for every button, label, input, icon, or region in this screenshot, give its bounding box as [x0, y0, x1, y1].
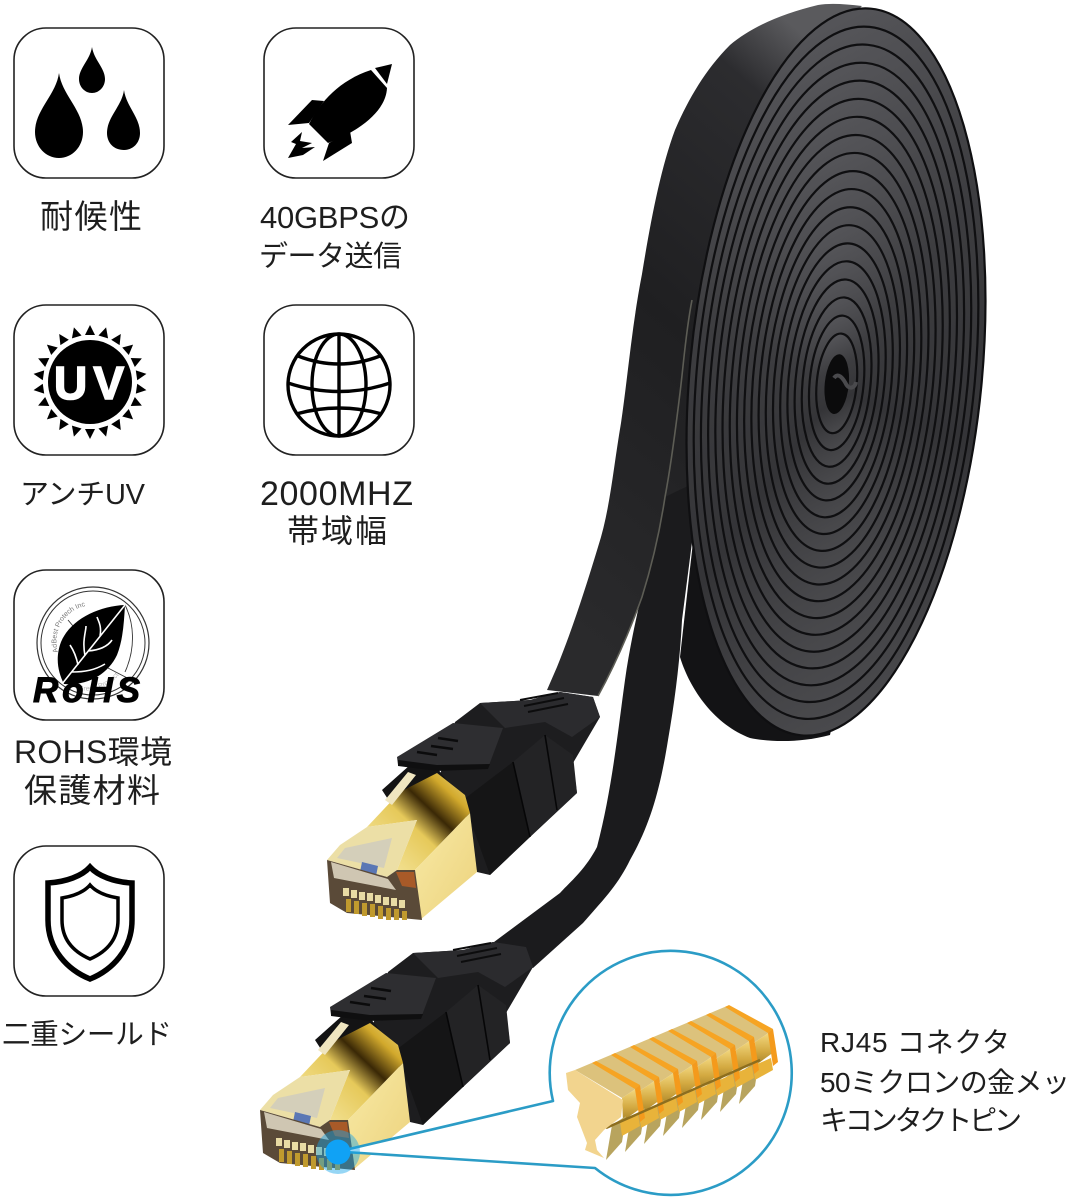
label: weather resistance: 耐候性 — [40, 198, 142, 235]
lower coil band — [680, 480, 860, 741]
icon: anti UV sun — [14, 305, 164, 455]
cable coil — [490, 0, 1016, 968]
callout: blue magnifier outline — [345, 951, 792, 1195]
label: double shield: 二重シールド — [2, 1019, 172, 1051]
illustration: gold contact pins — [566, 1005, 778, 1160]
connector: lower RJ45 plug — [260, 942, 533, 1170]
icon: globe — [264, 305, 414, 455]
label: 2000MHz bandwidth: 2000MHZ — [260, 475, 413, 513]
label: RoHS environmental materials: 保護材料 — [24, 772, 160, 809]
coil center curl — [834, 376, 856, 388]
icon: RoHS leaf: Green Product — [82, 672, 119, 691]
label: RJ45 connector gold plated contact pins — [820, 1027, 1070, 1136]
icon: blue highlight dot — [316, 1130, 360, 1174]
label: 40Gbps data transmission: データ送信 — [259, 240, 402, 273]
icon: RoHS leaf: RoHS — [33, 671, 140, 710]
icon: RoHS leaf — [13, 569, 165, 721]
label: 2000MHz bandwidth: 帯域幅 — [287, 513, 387, 549]
label: 40Gbps data transmission: 40GBPSの — [260, 200, 410, 235]
icon: weather resistance drops — [14, 28, 164, 178]
icon: rocket — [264, 28, 414, 178]
icon: RoHS leaf: AdBest Protech Inc — [52, 602, 85, 652]
label: 40Gbps data transmission — [259, 200, 410, 273]
second cable strand — [490, 480, 700, 968]
label: RJ45 connector gold plated contact pins: キコンタクトピン — [820, 1105, 1022, 1136]
coil spiral face — [656, 0, 1016, 749]
connector: upper RJ45 plug — [327, 692, 600, 920]
label: anti UV: アンチUV — [20, 479, 146, 511]
first cable strand and coil side — [547, 4, 862, 696]
label: RoHS environmental materials: ROHS環境 — [14, 734, 172, 770]
label: RJ45 connector gold plated contact pins: RJ45 コネクタ — [820, 1027, 1010, 1058]
label: 2000MHz bandwidth — [260, 475, 413, 549]
strand edge highlight — [598, 300, 692, 696]
label: RJ45 connector gold plated contact pins: 50ミクロンの金メッ — [820, 1067, 1070, 1098]
icon: anti UV sun: UV — [54, 357, 124, 409]
icon: double shield — [14, 846, 164, 996]
label: RoHS environmental materials — [14, 734, 172, 809]
